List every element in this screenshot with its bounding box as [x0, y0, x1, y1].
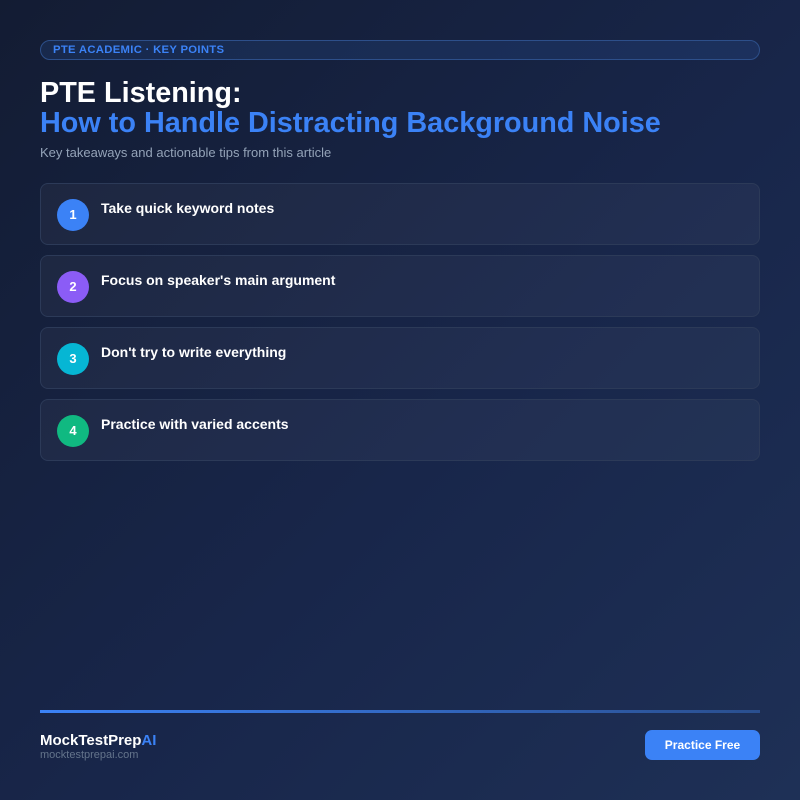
- subtitle: Key takeaways and actionable tips from this article: [40, 145, 331, 160]
- text 4: Practice with varied accents: [101, 416, 289, 432]
- title: [40, 77, 661, 139]
- number 4: [57, 415, 89, 447]
- card 2: [40, 255, 760, 317]
- number 3: 3: [69, 351, 77, 366]
- number 2: [57, 271, 89, 303]
- number 1: 1: [69, 207, 77, 222]
- button: Practice Free: [665, 738, 740, 752]
- card 1: [40, 183, 760, 245]
- text 2: Focus on speaker's main argument: [101, 272, 335, 288]
- title: PTE Listening:: [40, 77, 242, 109]
- title: How to Handle Distracting Background Noise: [40, 107, 661, 139]
- url: mocktestprepai.com: [40, 749, 138, 761]
- text 3: Don't try to write everything: [101, 344, 286, 360]
- number 3: [57, 343, 89, 375]
- card 3: [40, 327, 760, 389]
- badge: [40, 40, 760, 60]
- badge: PTE ACADEMIC · KEY POINTS: [53, 44, 224, 56]
- text 1: Take quick keyword notes: [101, 200, 274, 216]
- brand: MockTestPrepAI: [40, 732, 156, 749]
- number 2: 2: [69, 279, 77, 294]
- number 1: [57, 199, 89, 231]
- card 4: [40, 399, 760, 461]
- number 4: 4: [69, 423, 77, 438]
- button: [645, 730, 760, 760]
